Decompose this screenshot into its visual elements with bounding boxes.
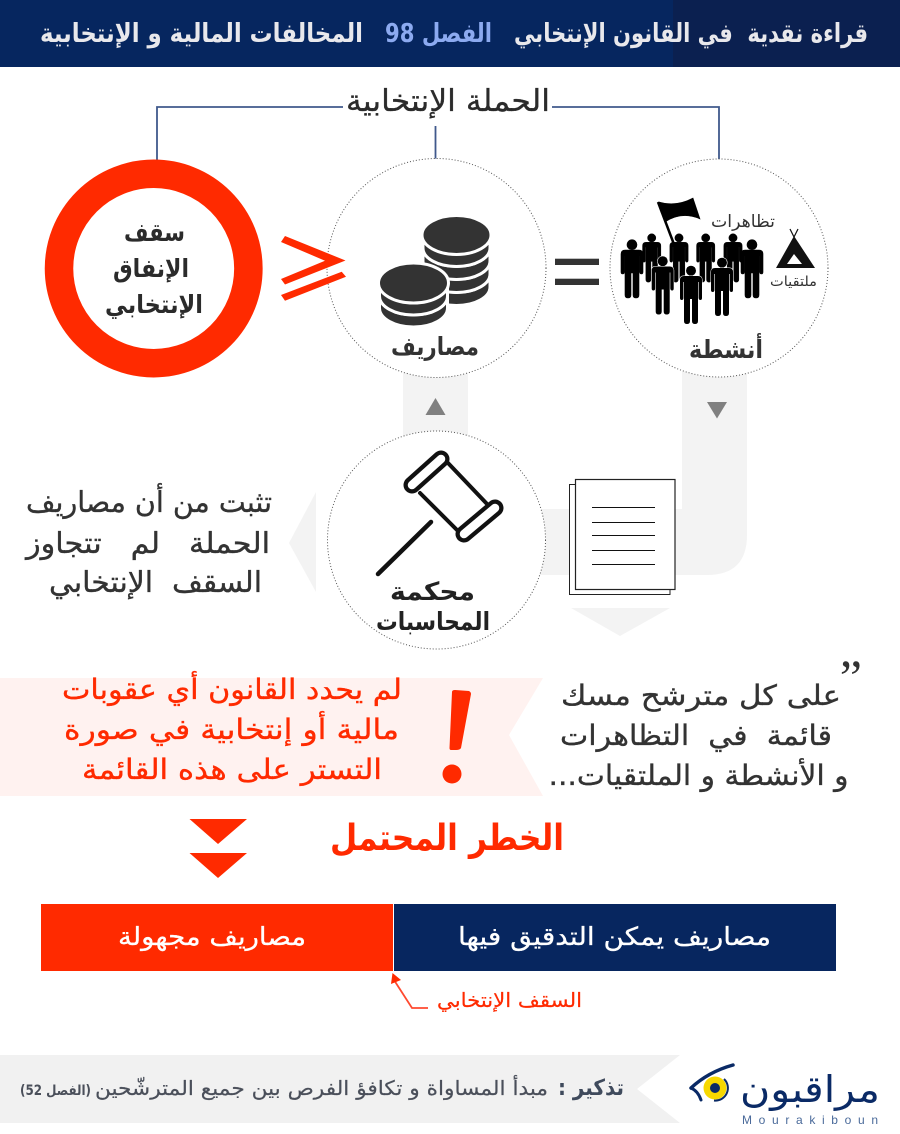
text block: candidate obligation xyxy=(548,649,862,792)
text block: candidate obligation: على كل مترشح مسك xyxy=(561,679,841,712)
label: court: محكمة xyxy=(390,577,475,606)
warning text: مالية أو إنتخابية في صورة xyxy=(64,710,399,746)
icon: tent xyxy=(776,229,815,268)
ring label: سقف xyxy=(124,218,185,247)
warning text: لم يحدد القانون أي عقوبات xyxy=(62,670,402,706)
bar: unknown expenses: مصاريف مجهولة xyxy=(118,922,306,952)
panel: activities xyxy=(610,159,828,377)
arrow: up triangle xyxy=(426,398,446,415)
heading: potential risk: الخطر المحتمل xyxy=(330,818,564,859)
reminder label: تذكير : xyxy=(558,1076,624,1101)
logo latin name: Mourakiboun xyxy=(742,1113,878,1127)
bar chart: expenses split xyxy=(41,904,836,971)
warning text: التستر على هذه القائمة xyxy=(82,753,382,786)
text block: court verification: السقف الإنتخابي xyxy=(49,565,262,600)
arrow: down triangle xyxy=(707,402,727,418)
panel: court of accounts: المحاسبات xyxy=(376,607,490,636)
icon: greater-or-equal sign xyxy=(281,236,346,301)
warning text xyxy=(62,670,402,786)
campaign heading with connectors xyxy=(157,84,719,160)
heading: electoral campaign: الحملة الإنتخابية xyxy=(346,84,550,119)
panel: expenses xyxy=(327,158,546,378)
flow background bands xyxy=(289,370,747,636)
callout: spending cap marker: السقف الإنتخابي xyxy=(437,988,582,1013)
callout: spending cap marker xyxy=(391,973,582,1013)
text block: court verification xyxy=(24,482,272,600)
panel: warning band xyxy=(0,670,543,796)
spending cap ring xyxy=(59,174,248,363)
icon: equals sign xyxy=(555,259,599,285)
icon: exclamation mark xyxy=(442,690,471,784)
ring label xyxy=(105,218,203,319)
panel: court of accounts xyxy=(328,431,546,649)
text block: candidate obligation: و الأنشطة و الملتقيات... xyxy=(548,757,848,792)
reminder text: مبدأ المساواة و تكافؤ الفرص بين جميع المترشّحين xyxy=(95,1075,548,1100)
label: meetings: ملتقيات xyxy=(770,274,817,290)
logo wordmark: مراقبون xyxy=(740,1068,880,1111)
header title: violations: المخالفات المالية و الإنتخابية xyxy=(40,19,363,49)
icon: double down chevrons xyxy=(190,819,247,878)
logo: Mourakiboun xyxy=(691,1065,880,1127)
text block: candidate obligation: قائمة في التظاهرات xyxy=(560,719,832,752)
icon: document list xyxy=(570,480,675,594)
quotation mark: ” xyxy=(840,649,862,705)
text block: court verification: الحملة لم تتجاوز xyxy=(24,526,270,561)
label: demonstrations: تظاهرات xyxy=(711,212,775,232)
label: expenses: مصاريف xyxy=(391,332,479,361)
icon: eye xyxy=(691,1065,733,1101)
bar: auditable expenses: مصاريف يمكن التدقيق فيها xyxy=(458,922,771,952)
icon: crowd with flag xyxy=(621,198,763,324)
text block: court verification: تثبت من أن مصاريف xyxy=(26,482,272,519)
ring label: الإنتخابي xyxy=(105,290,203,319)
icon: coin stacks xyxy=(378,216,491,327)
label: activities: أنشطة xyxy=(689,333,763,364)
icon: gavel xyxy=(378,459,495,574)
bar: auditable expenses xyxy=(394,904,836,971)
panel: reminder footer xyxy=(0,1055,680,1123)
ring label: الإنفاق xyxy=(113,254,189,283)
bar: unknown expenses xyxy=(41,904,393,971)
reminder citation: (الفصل 52) xyxy=(20,1083,91,1099)
header title: article number: الفصل 98 xyxy=(385,19,492,49)
header banner xyxy=(0,0,900,67)
